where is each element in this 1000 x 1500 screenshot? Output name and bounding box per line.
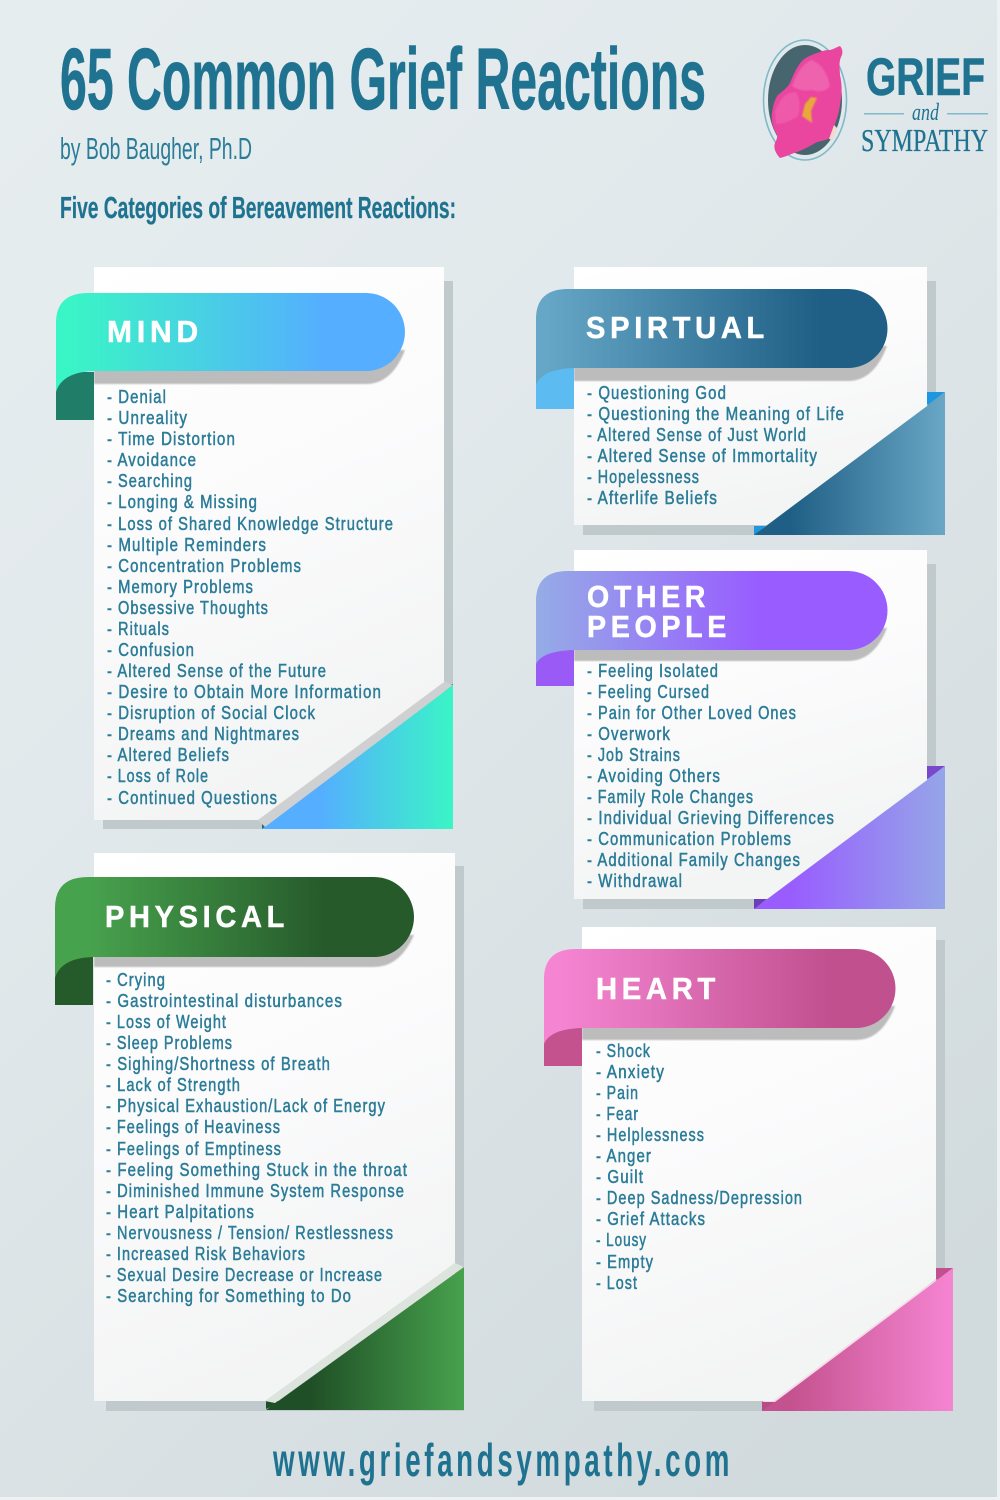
ribbon	[56, 293, 405, 392]
list: physical: - Increased Risk Behaviors	[106, 1244, 306, 1264]
list: physical: - Feelings of Emptiness	[106, 1139, 282, 1159]
heading: heart: HEART	[596, 971, 720, 1006]
list: other people: - Communication Problems	[587, 829, 792, 849]
list: mind: - Memory Problems	[107, 577, 254, 597]
list: mind: - Concentration Problems	[107, 556, 302, 576]
list: mind: - Confusion	[107, 640, 195, 660]
list: spiritual	[587, 383, 845, 508]
list: physical: - Crying	[106, 970, 166, 990]
list: mind: - Searching	[107, 471, 193, 491]
list: mind: - Dreams and Nightmares	[107, 724, 300, 744]
list: other people: - Feeling Cursed	[587, 682, 710, 702]
heading: other people: OTHER	[587, 579, 710, 614]
list: mind	[107, 387, 394, 808]
ribbon	[544, 949, 896, 1044]
list: heart: - Empty	[596, 1252, 654, 1272]
heading: spiritual: SPIRTUAL	[586, 310, 769, 345]
panel: physical	[55, 853, 464, 1411]
list: heart: - Lousy	[596, 1230, 647, 1250]
list: heart: - Anxiety	[596, 1062, 665, 1082]
list: spiritual: - Hopelessness	[587, 467, 700, 487]
list: other people: - Additional Family Changes	[587, 850, 801, 870]
ribbon	[536, 571, 888, 664]
list: heart: - Grief Attacks	[596, 1209, 706, 1229]
list: heart: - Helplessness	[596, 1125, 705, 1145]
list: spiritual: - Questioning the Meaning of Life	[587, 404, 845, 424]
list: other people	[587, 661, 835, 891]
panel: heart	[544, 927, 953, 1411]
list: physical: - Sleep Problems	[106, 1033, 233, 1053]
list: physical: - Gastrointestinal disturbances	[106, 991, 343, 1011]
list: heart: - Fear	[596, 1104, 639, 1124]
list: heart: - Shock	[596, 1041, 651, 1061]
list: mind: - Time Distortion	[107, 429, 236, 449]
panel: spiritual	[536, 267, 945, 535]
list: physical: - Sexual Desire Decrease or Increase	[106, 1265, 383, 1285]
list: physical: - Lack of Strength	[106, 1075, 241, 1095]
list: other people: - Avoiding Others	[587, 766, 721, 786]
list: heart: - Anger	[596, 1146, 652, 1166]
list: physical: - Sighing/Shortness of Breath	[106, 1054, 331, 1074]
list: heart: - Lost	[596, 1273, 638, 1293]
heading: other people	[587, 579, 731, 644]
list: physical: - Nervousness / Tension/ Restlessness	[106, 1223, 394, 1243]
list: mind: - Altered Beliefs	[107, 745, 230, 765]
list: mind: - Multiple Reminders	[107, 535, 267, 555]
list: mind: - Avoidance	[107, 450, 197, 470]
list: spiritual: - Altered Sense of Immortality	[587, 446, 818, 466]
heading: mind: MIND	[107, 314, 203, 349]
list: mind: - Denial	[107, 387, 167, 407]
logo: Grief and Sympathy	[764, 40, 988, 160]
list: spiritual: - Altered Sense of Just World	[587, 425, 807, 445]
ribbon	[536, 289, 888, 385]
list: heart: - Deep Sadness/Depression	[596, 1188, 803, 1208]
list: other people: - Family Role Changes	[587, 787, 754, 807]
list: physical: - Loss of Weight	[106, 1012, 227, 1032]
ribbon	[55, 877, 414, 978]
folded corner	[266, 1267, 464, 1410]
list: mind: - Rituals	[107, 619, 170, 639]
list: mind: - Altered Sense of the Future	[107, 661, 327, 681]
list: mind: - Loss of Shared Knowledge Structure	[107, 514, 394, 534]
list: mind: - Obsessive Thoughts	[107, 598, 269, 618]
list: physical: - Heart Palpitations	[106, 1202, 255, 1222]
list: mind: - Loss of Role	[107, 766, 209, 786]
author byline: by Bob Baugher, Ph.D	[60, 131, 252, 166]
heading: physical: PHYSICAL	[105, 899, 289, 934]
panel: other people	[536, 550, 945, 909]
list: mind: - Continued Questions	[107, 788, 278, 808]
logo wordmark	[861, 48, 988, 158]
list: mind: - Longing & Missing	[107, 492, 258, 512]
subheading: Five Categories of Bereavement Reactions:	[60, 190, 456, 225]
folded corner	[754, 392, 945, 535]
list: other people: - Overwork	[587, 724, 671, 744]
list: heart	[596, 1041, 803, 1293]
list: other people: - Feeling Isolated	[587, 661, 719, 681]
list: heart: - Guilt	[596, 1167, 644, 1187]
list: physical: - Feeling Something Stuck in the throat	[106, 1160, 408, 1180]
list: mind: - Unreality	[107, 408, 188, 428]
list: physical: - Searching for Something to Do	[106, 1286, 352, 1306]
list: mind: - Disruption of Social Clock	[107, 703, 316, 723]
list: heart: - Pain	[596, 1083, 639, 1103]
list: physical: - Diminished Immune System Response	[106, 1181, 405, 1201]
folded corner	[754, 766, 945, 909]
list: other people: - Withdrawal	[587, 871, 683, 891]
list: other people: - Individual Grieving Differences	[587, 808, 835, 828]
list: physical: - Feelings of Heaviness	[106, 1117, 281, 1137]
list: physical: - Physical Exhaustion/Lack of Energy	[106, 1096, 386, 1116]
icon: flower medallion	[764, 40, 846, 160]
logo wordmark: and	[912, 100, 940, 126]
list: spiritual: - Afterlife Beliefs	[587, 488, 718, 508]
list: spiritual: - Questioning God	[587, 383, 727, 403]
list: physical	[106, 970, 408, 1306]
list: other people: - Job Strains	[587, 745, 681, 765]
list: mind: - Desire to Obtain More Information	[107, 682, 382, 702]
folded corner	[762, 1268, 953, 1411]
heading: other people: PEOPLE	[587, 609, 731, 644]
list: other people: - Pain for Other Loved Ones	[587, 703, 797, 723]
folded corner	[262, 685, 453, 829]
panel: mind	[56, 267, 453, 829]
